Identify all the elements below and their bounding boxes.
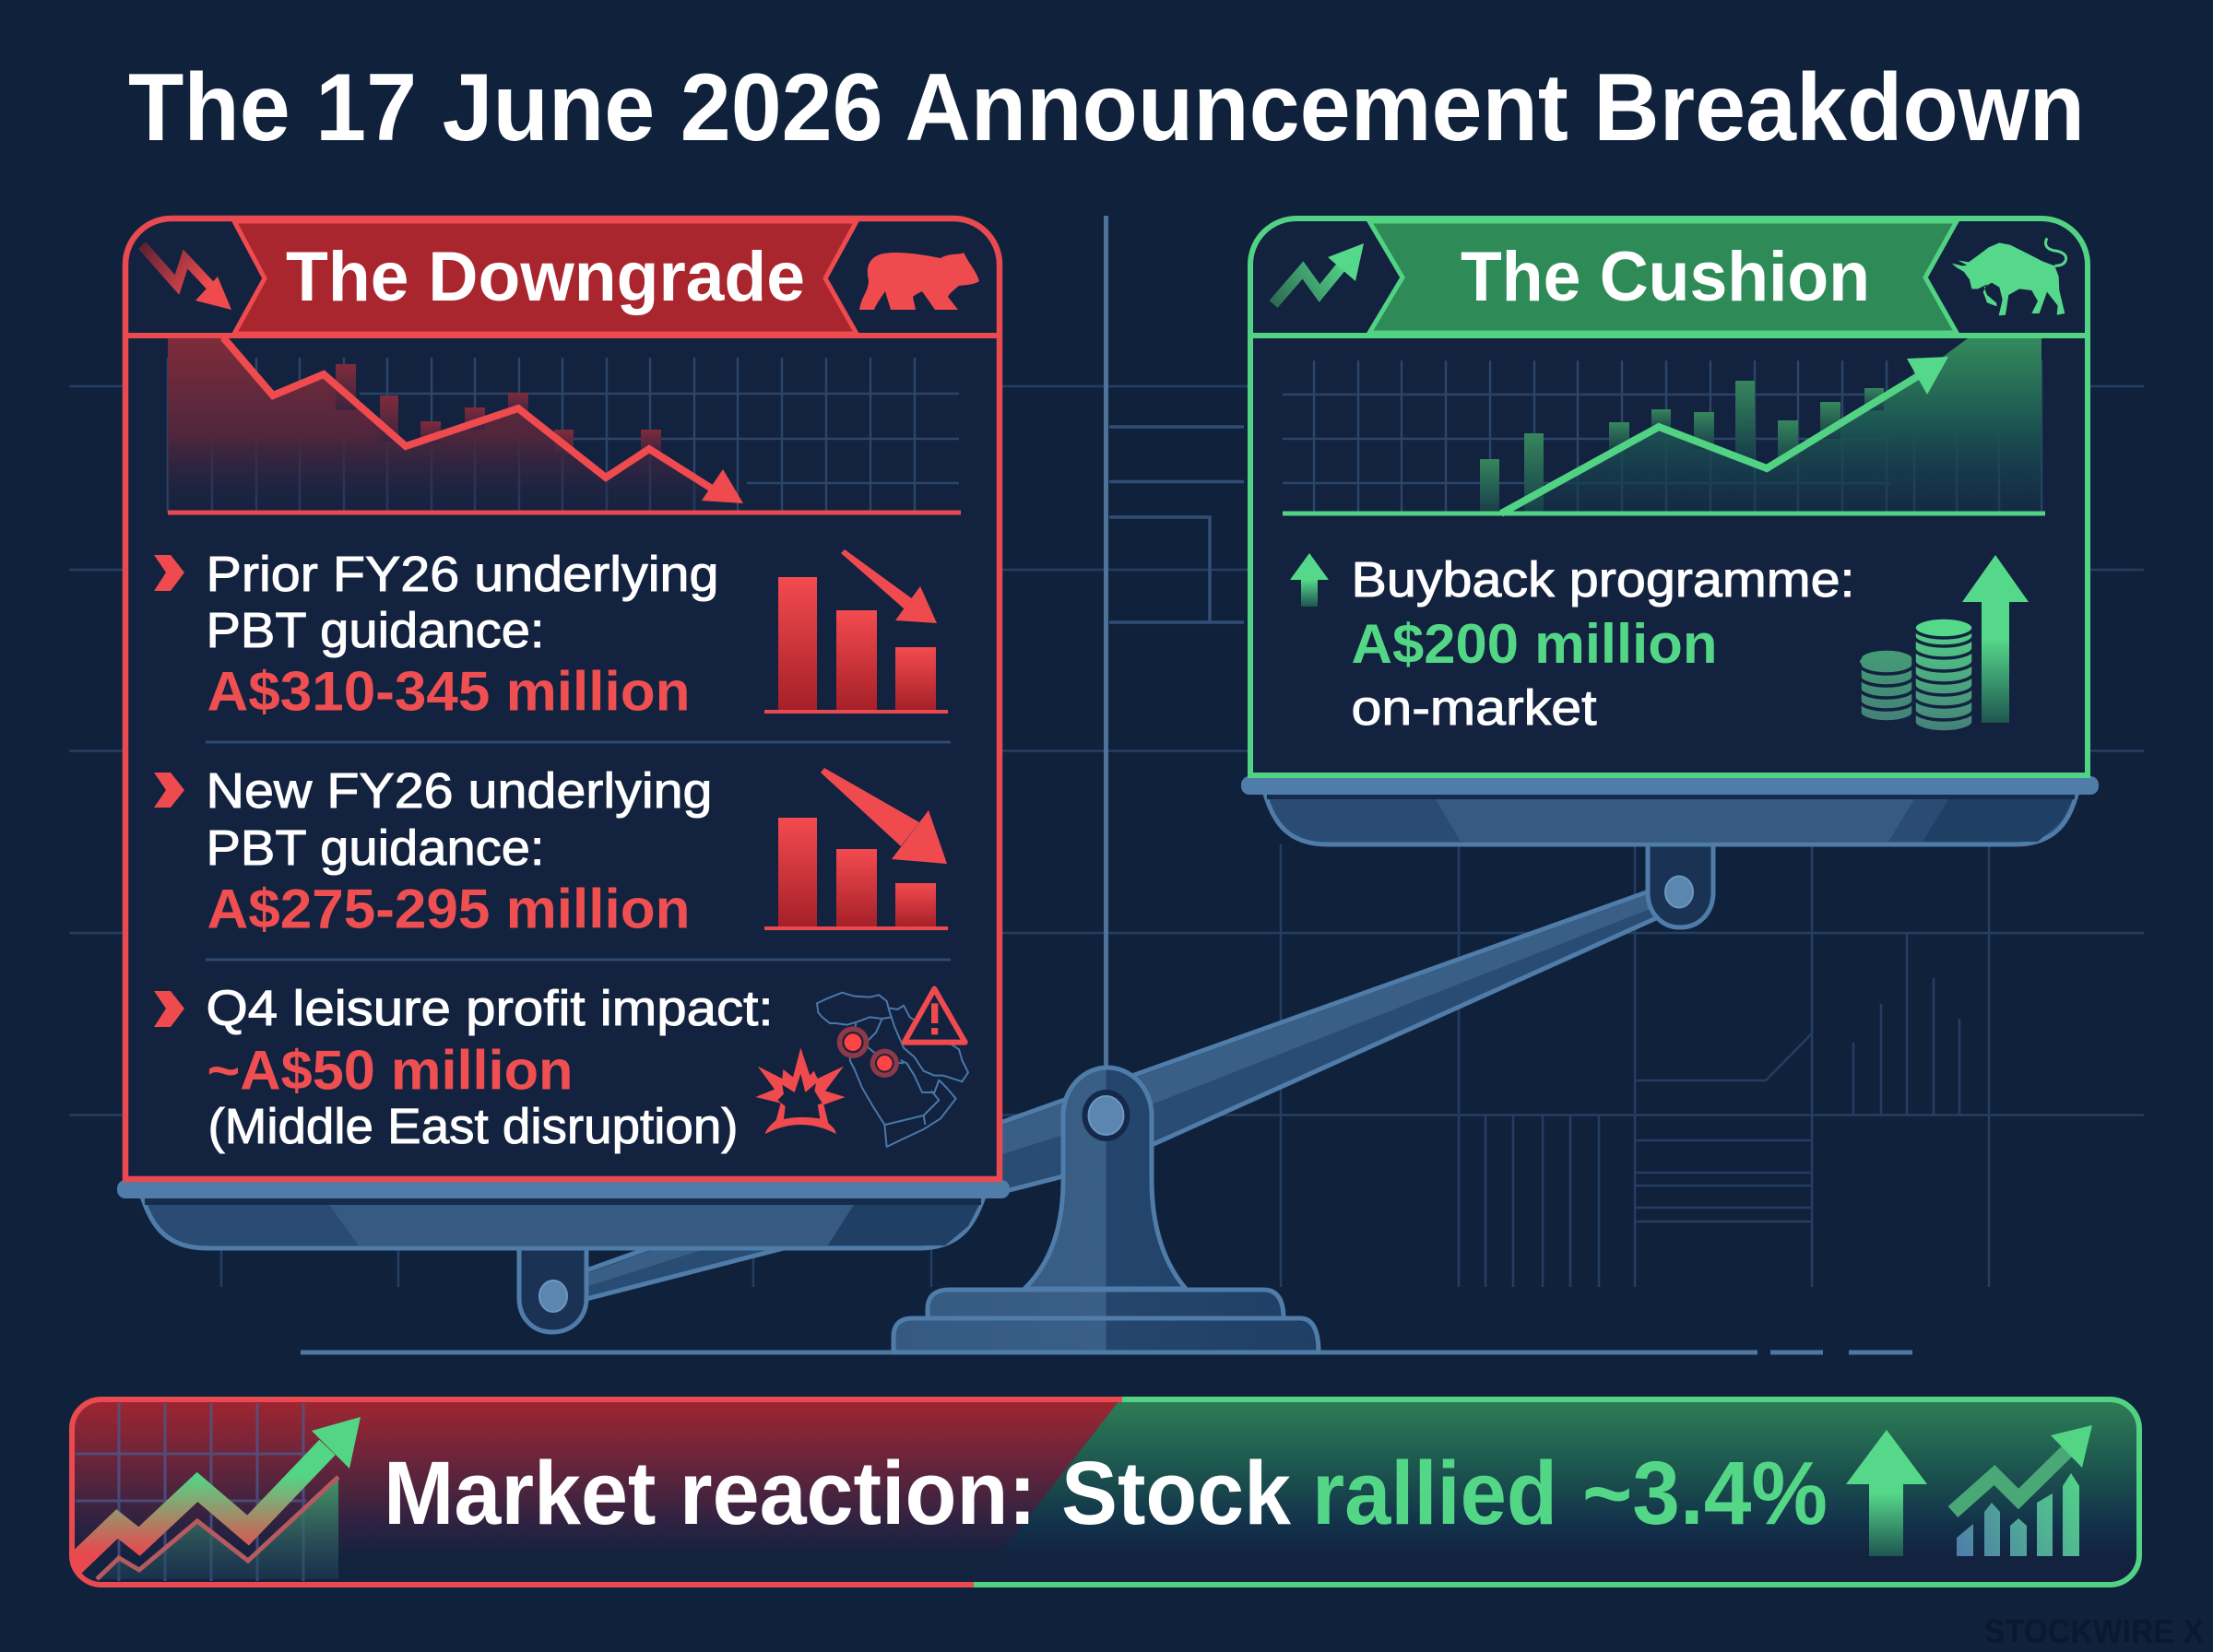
left pan [117, 1180, 1010, 1248]
header ribbon: the cushion: The Cushion [1461, 238, 1870, 316]
icon: coins and arrow [1858, 555, 2029, 732]
bullet up arrow [1290, 553, 1329, 607]
fulcrum stand [893, 1068, 1319, 1352]
icon: mixed rally chart [72, 1403, 361, 1581]
icon: bear [859, 253, 979, 310]
item: buyback: A$200 million [1352, 613, 1717, 675]
icon: bull [1952, 238, 2066, 315]
item: buyback [1290, 552, 2029, 736]
line chart: rally [1283, 338, 2045, 513]
icon: falling bars [764, 549, 948, 712]
panel: the cushion [1250, 218, 2088, 775]
scale centre post line [1104, 216, 1108, 1069]
icon: rising bars [1953, 1425, 2092, 1556]
item: new guidance: New FY26 underlying [207, 763, 712, 819]
icon: up arrow [1273, 243, 1364, 304]
market reaction banner: rallied [1312, 1443, 1557, 1543]
market reaction banner: ~3.4% [1582, 1443, 1828, 1543]
icon: middle east map with alert [755, 989, 968, 1147]
right hinge [1648, 843, 1713, 927]
bullet chevron [154, 555, 184, 591]
header ribbon: the downgrade [234, 221, 857, 334]
item: prior guidance: A$310-345 million [207, 660, 690, 723]
market reaction banner: Stock [1061, 1443, 1292, 1543]
icon: up arrow [1846, 1430, 1927, 1556]
scale beam [586, 891, 1664, 1299]
bullet chevron [154, 773, 184, 808]
item: new guidance [154, 763, 948, 940]
item: leisure impact: Q4 leisure profit impact: [207, 981, 773, 1036]
item: prior guidance: Prior FY26 underlying [207, 547, 719, 602]
item: prior guidance [154, 547, 948, 723]
right pan [1241, 776, 2099, 844]
icon: down arrow [142, 245, 231, 310]
item: new guidance: A$275-295 million [207, 878, 690, 940]
line chart: decline [168, 337, 961, 513]
watermark: STOCKWIRE X [1984, 1612, 2204, 1650]
ground line [301, 1350, 1912, 1355]
left hinge [519, 1246, 586, 1332]
item: buyback: on-market [1352, 680, 1597, 736]
item: leisure impact: (Middle East disruption) [208, 1099, 738, 1154]
blueprint grid background [69, 386, 2144, 1287]
panel: the downgrade [125, 218, 1000, 1179]
item: new guidance: PBT guidance: [207, 820, 544, 876]
bullet chevron [154, 991, 184, 1027]
item: leisure impact [154, 981, 968, 1154]
market reaction banner: Market reaction: [384, 1443, 1036, 1543]
item: leisure impact: ~A$50 million [207, 1040, 574, 1101]
item: buyback: Buyback programme: [1352, 552, 1855, 608]
icon: falling bars [764, 768, 948, 928]
market reaction banner [72, 1397, 2142, 1587]
item: prior guidance: PBT guidance: [207, 603, 544, 658]
title: The 17 June 2026 Announcement Breakdown [128, 54, 2085, 161]
header ribbon: the downgrade: The Downgrade [286, 238, 805, 316]
header ribbon: the cushion [1369, 221, 1957, 333]
